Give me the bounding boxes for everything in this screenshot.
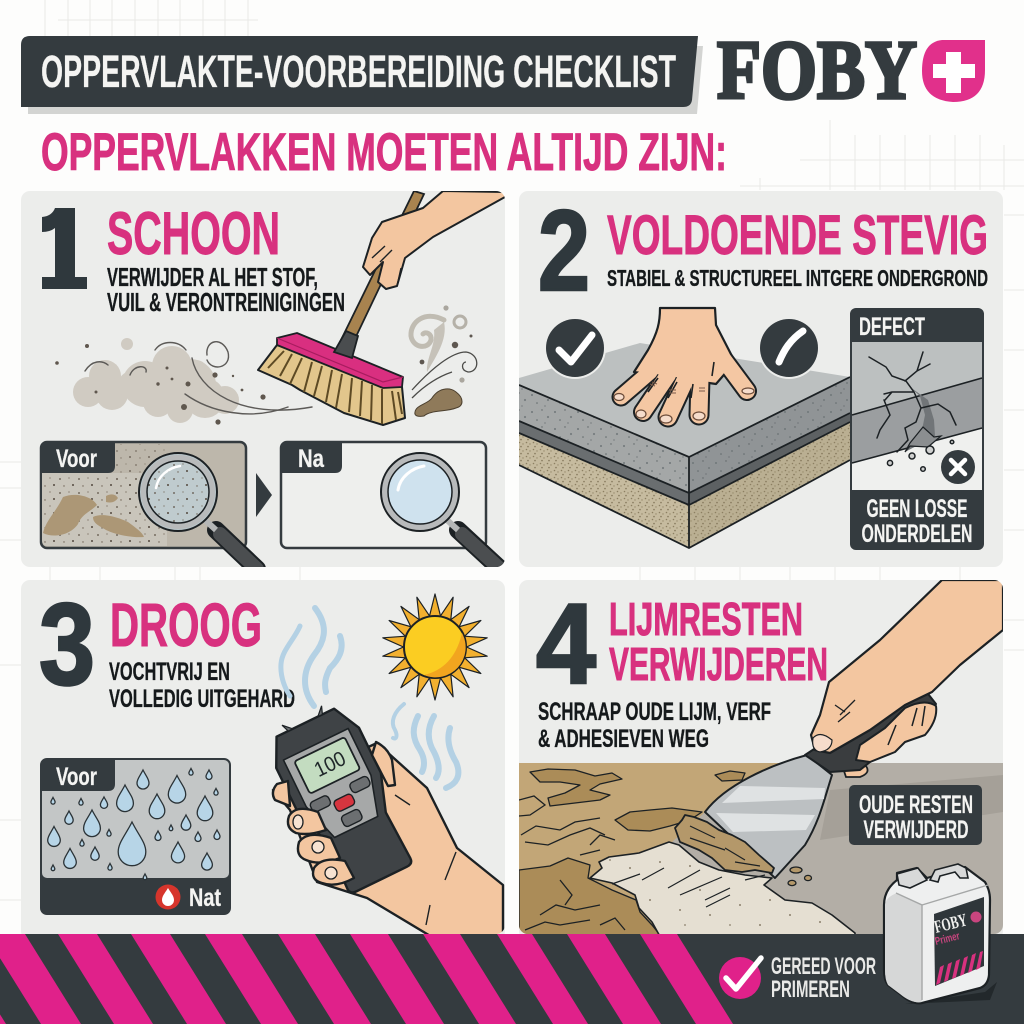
description	[107, 262, 345, 317]
label na	[281, 442, 342, 473]
label gereed voor primeren: GEREED VOOR	[771, 953, 876, 980]
arrow	[256, 473, 272, 517]
ready for priming badge	[719, 953, 876, 1003]
panel 3: droog	[21, 579, 505, 940]
description	[109, 658, 295, 713]
icon: hand pressing surface	[614, 308, 754, 423]
after panel: Na	[298, 445, 325, 473]
before panel	[41, 442, 246, 548]
footer stripe band	[0, 934, 1024, 1024]
description: VOCHTVRIJ EN	[109, 658, 230, 686]
heading	[609, 593, 828, 690]
illustration: hand behind meter	[273, 743, 503, 940]
panel: defect	[850, 308, 984, 550]
description: VUIL & VERONTREINIGINGEN	[107, 287, 345, 317]
label defect: DEFECT	[859, 313, 925, 341]
illustration: scraper blade	[675, 755, 832, 886]
title banner	[21, 36, 703, 114]
illustration: fingers on meter	[273, 742, 395, 885]
icon: x circle	[941, 450, 975, 484]
number 1	[42, 208, 87, 289]
panel 1: schoon	[21, 191, 505, 569]
icon: red drop	[156, 884, 180, 910]
number 4: 4	[536, 581, 596, 708]
heading: LIJMRESTEN	[609, 593, 803, 645]
jerrycan label: Primer	[934, 930, 961, 948]
label geen losse onderdelen	[862, 495, 972, 548]
illustration: layered substrate block	[519, 343, 850, 548]
icon: check circle left	[544, 317, 606, 379]
icon: magnifier on dirt	[139, 453, 257, 569]
illustration: cracked slab	[852, 342, 982, 490]
number 3: 3	[39, 579, 95, 709]
panel 4: lijmresten verwijderen	[519, 580, 1003, 940]
illustration: floor with adhesive	[519, 763, 1003, 940]
meter display: 100	[311, 747, 350, 782]
icon: pink shield with plus	[922, 40, 985, 102]
illustration: hand holding scraper	[805, 580, 1003, 777]
illustration: dust swirls right	[411, 305, 477, 416]
jerrycan label	[932, 897, 984, 986]
heading schoon: SCHOON	[107, 200, 280, 267]
icon: magnifier on clean surface	[381, 453, 498, 567]
heading: VERWIJDEREN	[609, 638, 828, 690]
label oude resten verwijderd	[849, 785, 982, 845]
before panel: Voor	[56, 445, 97, 473]
panel 2: voldoende stevig	[519, 188, 1003, 567]
number 2: 2	[538, 188, 590, 315]
label gereed voor primeren: PRIMEREN	[771, 976, 850, 1003]
heading droog: DROOG	[110, 591, 262, 659]
description: VERWIJDER AL HET STOF,	[107, 262, 318, 292]
label voor	[41, 442, 115, 473]
dirt pile	[415, 389, 462, 416]
icon: check circle right	[758, 317, 820, 379]
description: VOLLEDIG UITGEHARD	[109, 685, 295, 713]
icon: pink check circle	[719, 957, 761, 999]
illustration: primer jerrycan	[884, 864, 997, 1004]
before panel wet	[41, 759, 230, 914]
icon: moisture meter	[260, 695, 423, 899]
illustration: broom with hand	[258, 191, 505, 425]
water drops	[48, 768, 220, 880]
illustration: dust cloud	[55, 338, 312, 425]
label nat: Nat	[189, 884, 222, 912]
label gereed voor primeren	[771, 953, 876, 1003]
description: SCHRAAP OUDE LIJM, VERF	[538, 698, 771, 726]
title text: OPPERVLAKTE-VOORBEREIDING CHECKLIST	[41, 46, 676, 97]
description	[538, 698, 771, 753]
icon: vapor waves above meter	[281, 608, 458, 788]
meter display	[294, 737, 360, 794]
before panel wet: Voor	[56, 763, 97, 791]
jerrycan label: FOBY	[932, 909, 969, 937]
after panel	[281, 442, 486, 548]
icon: sun	[382, 594, 488, 700]
description: & ADHESIEVEN WEG	[538, 725, 709, 753]
label voor	[41, 759, 115, 791]
logo: FOBY plus: FOBY	[717, 24, 917, 117]
icon: hand gripping broom	[363, 191, 505, 289]
